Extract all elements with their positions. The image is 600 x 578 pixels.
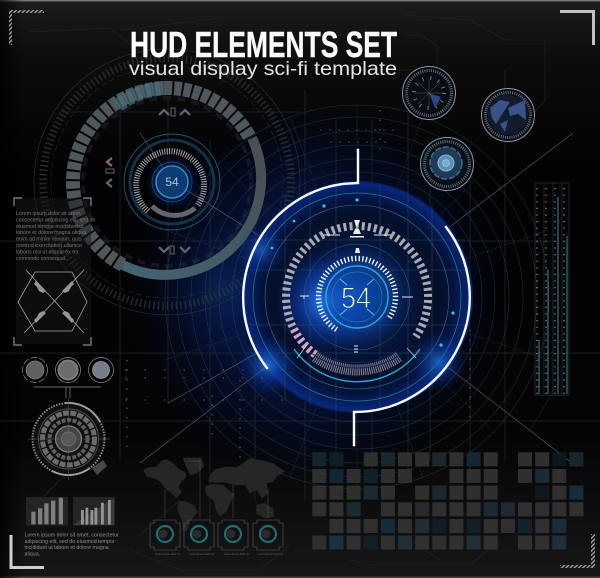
gauge number: 54 — [341, 282, 371, 315]
left dial chevrons — [106, 108, 190, 254]
widget 4 — [253, 520, 283, 550]
widget captions: Lorem ipsum dolor sit — [258, 552, 283, 556]
small dial number: 54 — [165, 175, 179, 189]
compass gauge — [402, 66, 456, 120]
widget captions — [155, 552, 283, 556]
main gauge — [236, 150, 473, 445]
concentric rings — [253, 193, 461, 401]
zigzag outer ring of the left dial — [34, 49, 300, 315]
subtitle: visual display sci-fi template — [129, 58, 397, 80]
square tile grid — [312, 452, 583, 550]
inner bright tick ring — [322, 262, 392, 332]
axis marks — [300, 235, 413, 352]
blueprint grid inside the disc — [250, 185, 465, 410]
title: HUD ELEMENTS SET — [130, 24, 397, 65]
corner bracket: bottom left — [10, 535, 44, 569]
widget captions: Lorem ipsum dolor sit — [155, 552, 180, 556]
vertical data bars — [535, 183, 569, 395]
radial blueprint grid — [165, 105, 549, 490]
corner bracket: bottom right — [560, 534, 595, 568]
lorem paragraph: Lorem ipsum dolor sit amet, — [16, 211, 81, 217]
bottom lorem paragraph: adipiscing elit, sed do eiusmod tempor — [24, 539, 115, 545]
hexagon arrows icon — [18, 270, 87, 333]
lorem paragraph: enim ad minim veniam, quis — [16, 237, 82, 243]
cyan indicator dots — [271, 198, 455, 347]
globe gauge — [482, 88, 534, 142]
widget captions: Lorem ipsum dolor sit — [189, 552, 214, 556]
bottom lorem paragraph: incididunt ut labore et dolore magna — [24, 545, 109, 551]
lorem paragraph: consectetur adipiscing elit, sed do — [16, 217, 96, 223]
lorem paragraph: eiusmod tempor incididunt ut — [16, 224, 84, 230]
bottom lorem paragraph: Lorem ipsum dolor sit amet, consectetur — [24, 532, 119, 538]
corner bracket: top left — [9, 10, 44, 45]
lorem paragraph: labore et dolore magna aliqua. — [16, 230, 88, 236]
world map — [143, 458, 285, 532]
widget 3 — [218, 520, 248, 550]
scattered blueprint ticks — [125, 110, 470, 460]
corner bracket: top right — [560, 10, 595, 45]
four radar widgets — [150, 520, 283, 550]
bar chart 2 — [73, 497, 115, 526]
white outer arcs — [243, 150, 470, 445]
small central dial — [124, 134, 220, 230]
top pointer — [350, 220, 364, 253]
blue disc — [241, 181, 473, 413]
three small dials — [22, 358, 114, 398]
bottom data band — [315, 357, 399, 370]
pink tick accents — [293, 327, 315, 354]
lorem paragraph: commodo consequat. — [16, 256, 67, 262]
large grey dial — [28, 398, 110, 480]
widget captions: Lorem ipsum dolor sit — [224, 552, 249, 556]
map to widget connector lines — [165, 460, 268, 518]
outer tick ring — [286, 226, 428, 354]
bright glow spots — [236, 224, 468, 395]
lorem paragraph: laboris nisi ut aliquip ex ea — [16, 249, 78, 255]
left text panel — [14, 198, 97, 345]
widget 1 — [150, 520, 180, 550]
bar chart 1 — [26, 497, 68, 526]
widget 2 — [184, 520, 214, 550]
radar gauge — [420, 138, 474, 190]
left grey segmented ring — [73, 88, 261, 275]
bottom lorem paragraph: aliqua. — [24, 551, 40, 557]
lorem paragraph: nostrud exercitation ullamco — [16, 243, 82, 249]
